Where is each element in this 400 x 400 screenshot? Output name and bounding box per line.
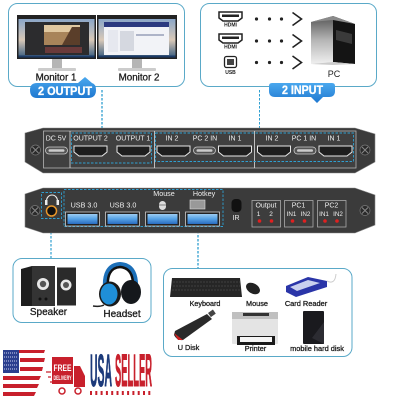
usb labels [71, 189, 216, 210]
usb ports [66, 212, 220, 226]
icon: mouse [244, 280, 262, 297]
port labels: IN 2 [166, 136, 179, 142]
port labels [46, 136, 341, 142]
icon: card reader [286, 274, 336, 297]
badge: 2 output [30, 77, 96, 98]
connector: audio line [50, 220, 52, 258]
icon: headset [93, 264, 141, 306]
icon: usa flag [3, 350, 45, 396]
indicator: pc2 [318, 200, 346, 227]
indicator: pc2: PC2 [325, 202, 338, 210]
label: u disk: U Disk [178, 343, 200, 352]
icon: hdmi 1 [219, 12, 242, 28]
connector: input line [258, 90, 260, 133]
label: mouse: Mouse [246, 299, 268, 308]
icon: printer [232, 312, 278, 345]
usa seller logo [90, 345, 152, 396]
ir sensor [232, 199, 242, 222]
icon: pc tower [311, 16, 355, 65]
port labels: IN 1 [229, 136, 242, 142]
indicator: output: 2 [269, 211, 273, 218]
badge: 2 input: 2 INPUT [282, 83, 324, 97]
indicator: pc1 [284, 200, 313, 227]
indicator: pc1: IN2 [301, 211, 311, 218]
indicator: pc2: IN2 [333, 211, 343, 218]
label: speaker: Speaker [30, 307, 68, 318]
connector: output line [101, 90, 103, 129]
label: card reader: Card Reader [285, 299, 328, 308]
label: hard disk: mobile hard disk [290, 344, 344, 353]
port labels: OUTPUT 2 [73, 136, 108, 142]
arrows [255, 12, 302, 69]
icon: hard disk [303, 311, 324, 344]
indicator: pc2: IN1 [319, 211, 329, 218]
indicator: output [252, 200, 280, 227]
label: headset: Headset [103, 309, 141, 320]
port labels: PC 2 IN [193, 136, 217, 142]
icon: hdmi 2 [219, 34, 242, 50]
icon: keyboard [170, 278, 242, 297]
panel: usb devices [164, 268, 352, 356]
monitor 2 [97, 15, 177, 71]
audio jack [45, 195, 59, 216]
label: monitor 2: Monitor 2 [119, 72, 159, 84]
panel: monitors [8, 4, 184, 86]
label: keyboard: Keyboard [190, 299, 220, 308]
icon: free delivery truck: FREE [54, 363, 72, 373]
icon: hotkey keyboard [190, 200, 205, 209]
icon: free delivery truck [46, 357, 85, 394]
label: printer: Printer [245, 344, 267, 353]
monitor 1 [17, 15, 96, 71]
port labels: PC 1 IN [292, 136, 316, 142]
usb labels: Hotkey [193, 189, 216, 198]
text: SELLER [115, 345, 152, 396]
usa seller logo: USA [90, 345, 112, 396]
usb labels: USB 3.0 [110, 200, 136, 210]
port labels: OUTPUT 1 [116, 136, 150, 142]
usb labels: Mouse [153, 189, 175, 198]
indicator: output: Output [255, 202, 277, 210]
icon: usb [224, 56, 236, 76]
icon: mouse [159, 201, 166, 210]
port labels: IN 1 [328, 136, 341, 142]
port labels: IN 2 [266, 136, 279, 142]
indicator: output: 1 [257, 211, 261, 218]
label: pc: PC [328, 69, 341, 79]
usb labels: USB 3.0 [71, 200, 97, 210]
device: front panel [25, 128, 375, 173]
panel: inputs [200, 4, 376, 86]
indicator: pc1: IN1 [287, 211, 297, 218]
indicator: pc1: PC1 [292, 202, 305, 210]
connector: usb line [197, 227, 199, 268]
badge: 2 output: 2 OUTPUT [38, 84, 93, 98]
badge: 2 input [269, 83, 335, 103]
port labels: DC 5V [46, 136, 67, 142]
ir sensor: IR [232, 215, 240, 222]
icon: hdmi 2: HDMI [224, 44, 237, 50]
icon: u disk [174, 310, 216, 340]
icon: hdmi 1: HDMI [224, 22, 237, 28]
icon: free delivery truck: DELIVERY [54, 376, 72, 382]
panel: audio devices [13, 258, 151, 322]
ports [46, 146, 352, 156]
label: monitor 1: Monitor 1 [36, 72, 76, 84]
device: back panel [25, 188, 375, 233]
icon: speakers [21, 266, 76, 306]
icon: usb: USB [225, 70, 236, 76]
